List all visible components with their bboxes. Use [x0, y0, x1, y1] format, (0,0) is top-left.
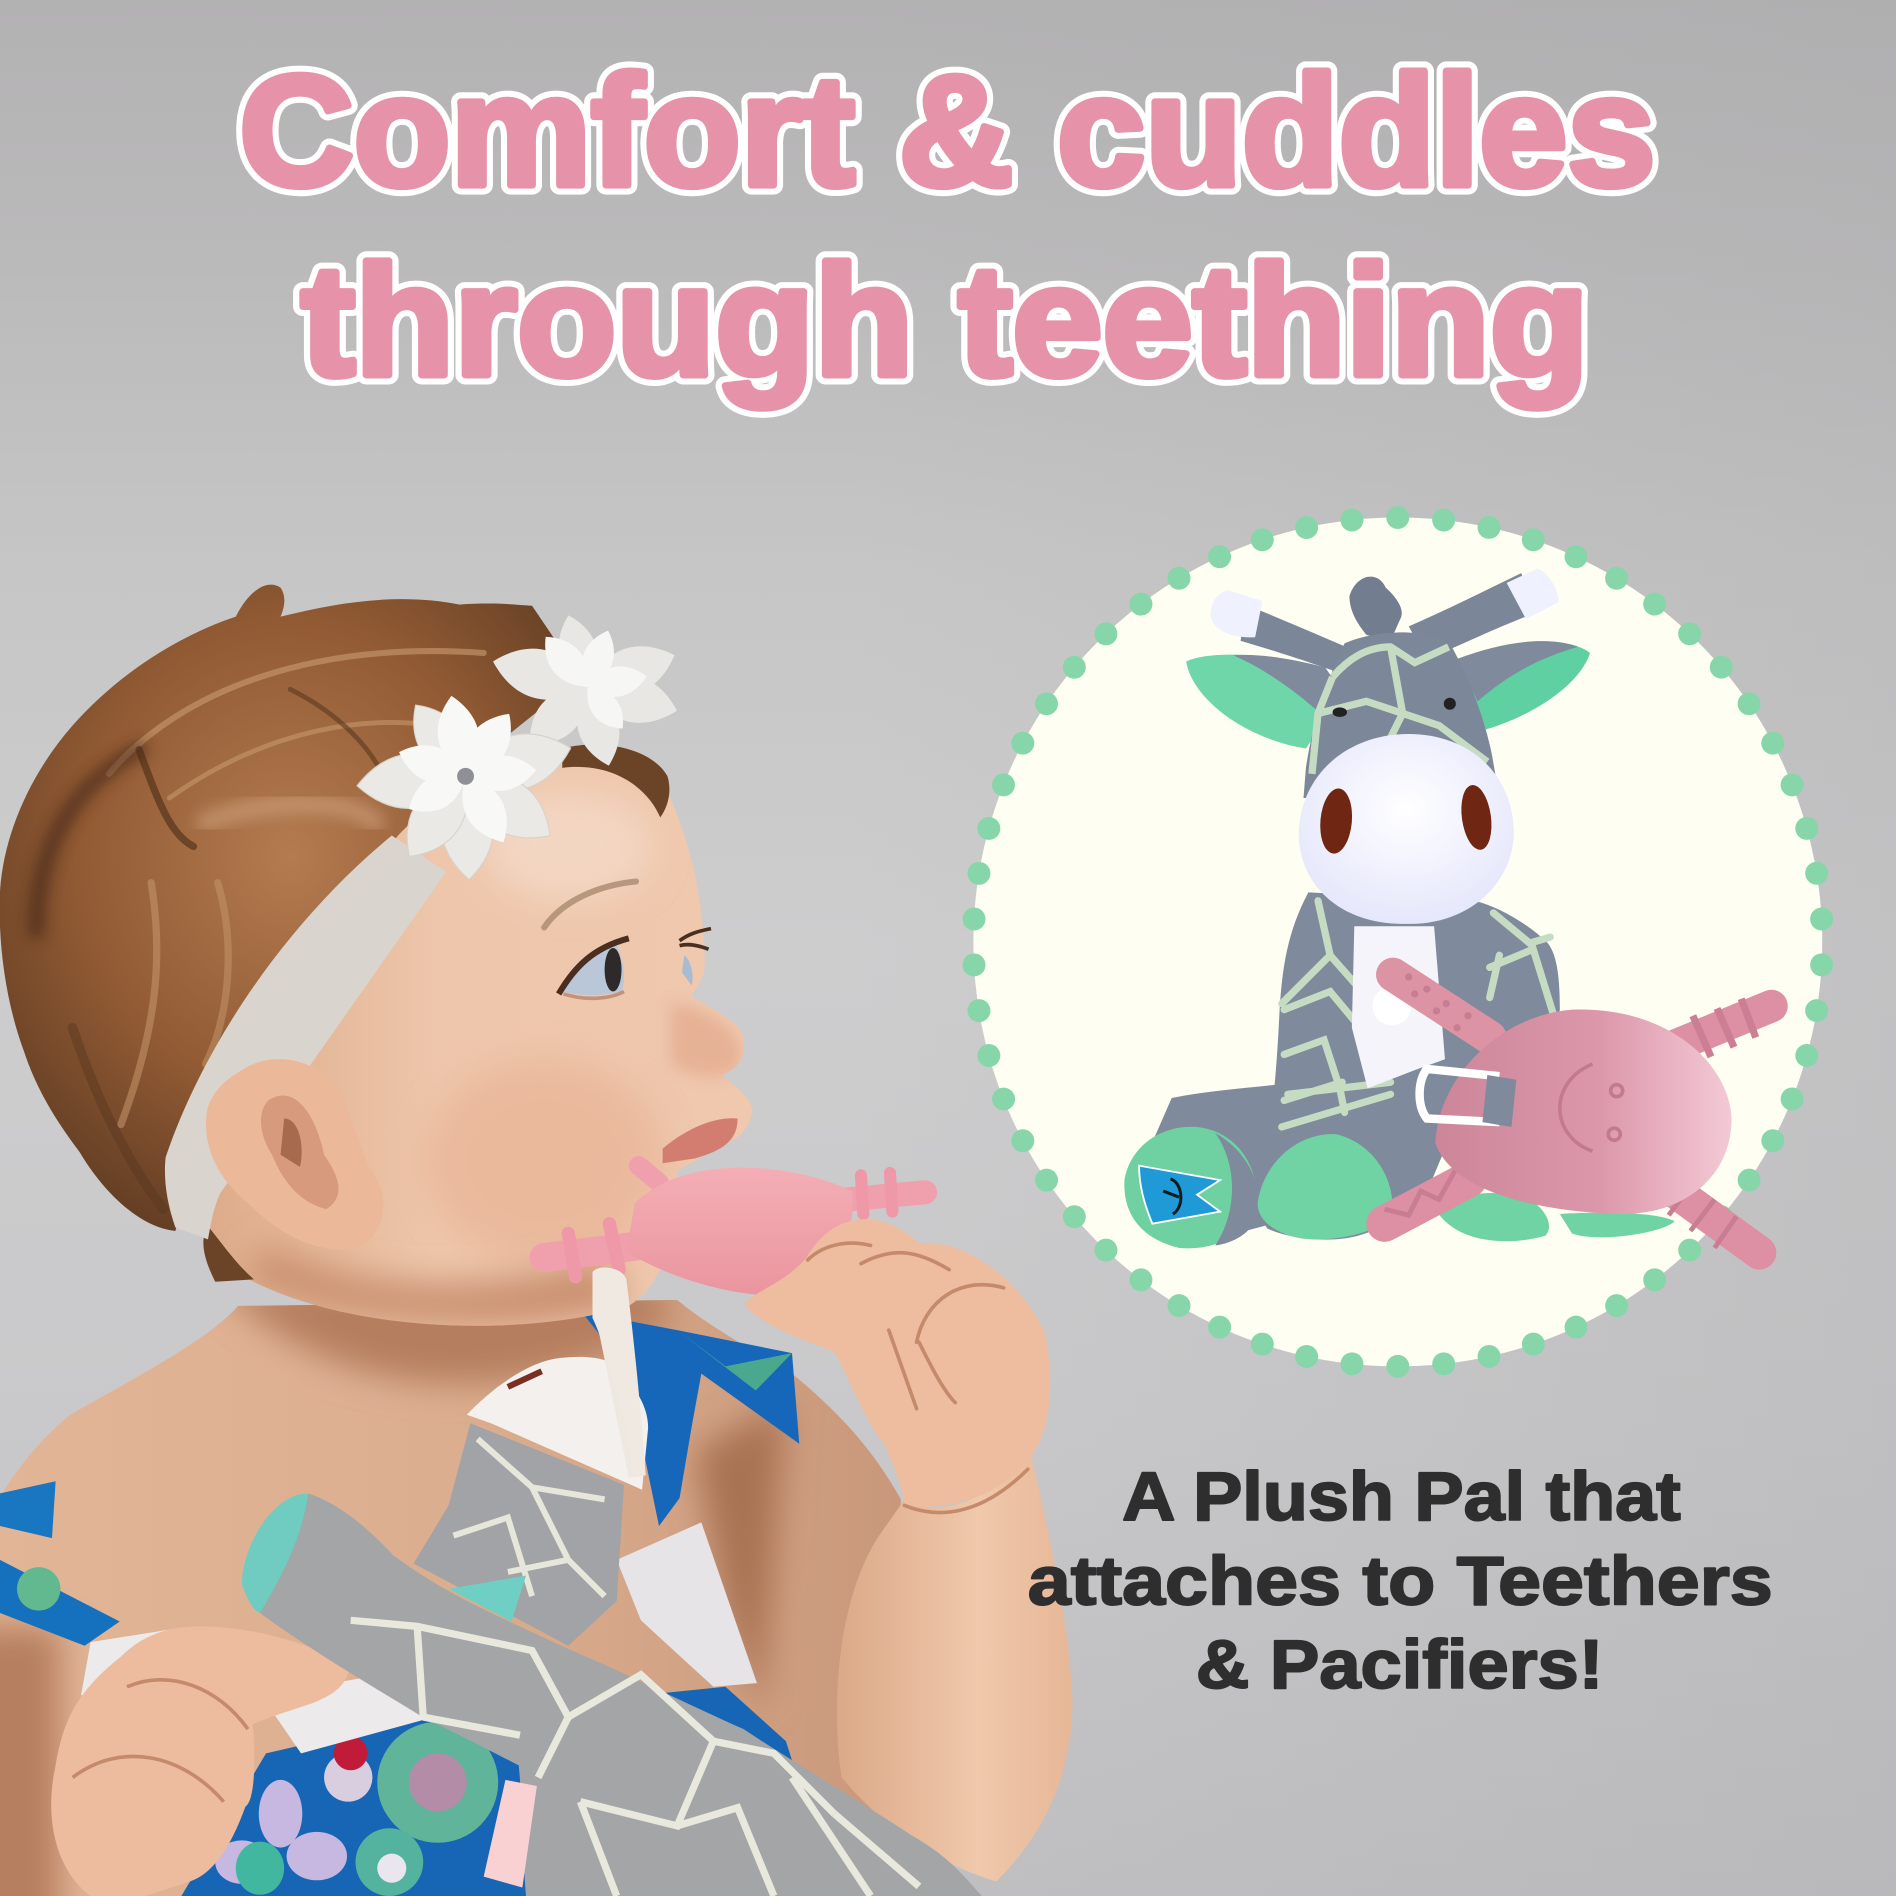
hair highlights and shadows: [36, 651, 484, 1209]
left tie: [0, 1481, 56, 1538]
finger creases: [808, 1243, 1028, 1513]
title: Comfort & cuddles: [239, 44, 1655, 219]
caption: [1028, 1458, 1773, 1703]
teether arm: bumpy upper left: [1393, 973, 1490, 1037]
teether arm: lower left: [1385, 1167, 1469, 1224]
dress flower: teal: [377, 1722, 498, 1843]
baby: [0, 585, 1073, 1896]
teether arm: upper right: [1675, 999, 1771, 1057]
giraffe body: [1260, 892, 1560, 1240]
giraffe paws: [1258, 1134, 1675, 1241]
left hand creases: [73, 1680, 248, 1802]
dress flower: lavender: [215, 1780, 347, 1895]
plush giraffe with teether: [1124, 568, 1771, 1253]
ribbon strap: [1352, 926, 1445, 1088]
forearm: [837, 1456, 1073, 1881]
baby torso: [0, 1300, 901, 1896]
headband flower: rear: [487, 611, 683, 771]
caption: attaches to Teethers: [1028, 1543, 1773, 1620]
teether in mouth: [544, 1166, 925, 1478]
dress: [0, 1312, 834, 1896]
caption: & Pacifiers!: [1196, 1626, 1603, 1703]
cord: [592, 1267, 646, 1478]
face shading: [242, 792, 741, 1326]
headband flower: front: [355, 692, 578, 881]
nape hair: [203, 1226, 254, 1282]
torso shading: [0, 1282, 786, 1896]
giraffe foot with blue tag: [1124, 1127, 1259, 1248]
hair: [0, 585, 580, 1231]
title: through teething: [301, 234, 1589, 409]
plush head and neck: [414, 1270, 648, 1646]
caption: A Plush Pal that: [1122, 1458, 1681, 1535]
teether body: [1435, 1010, 1732, 1214]
teether smile face: [1560, 1064, 1623, 1151]
giraffe back leg: [1155, 1085, 1282, 1245]
giraffe horns: [1210, 568, 1559, 675]
plush leg: [260, 1493, 982, 1896]
title: through teething: [301, 234, 1589, 409]
right strap: [582, 1312, 799, 1526]
left strap: [0, 1560, 120, 1646]
teether arm: lower right: [1669, 1183, 1759, 1253]
plush in baby hands: [242, 1270, 982, 1896]
title: [239, 44, 1655, 409]
left hand: [51, 1626, 351, 1896]
dress flower: small: [356, 1828, 423, 1896]
giraffe head: [1299, 632, 1514, 924]
baby mouth: [663, 1118, 738, 1163]
baby right hand: [744, 1219, 1050, 1507]
teether strap loop: [1420, 1069, 1516, 1127]
baby head: [177, 748, 752, 1326]
baby ear: [206, 1059, 384, 1249]
headband: [165, 836, 446, 1239]
front hair: [562, 744, 669, 817]
title: Comfort & cuddles: [239, 44, 1655, 219]
far eye: [680, 929, 711, 985]
baby eye: [559, 938, 629, 998]
baby eyebrow: [544, 881, 636, 927]
teether arms: [544, 1166, 925, 1320]
plush tag: [484, 1780, 537, 1888]
lace trim: [81, 1522, 757, 1753]
panel: dotted product circle: [973, 518, 1822, 1366]
giraffe ears: [1186, 641, 1590, 748]
giraffe body pattern: [1282, 901, 1554, 1127]
